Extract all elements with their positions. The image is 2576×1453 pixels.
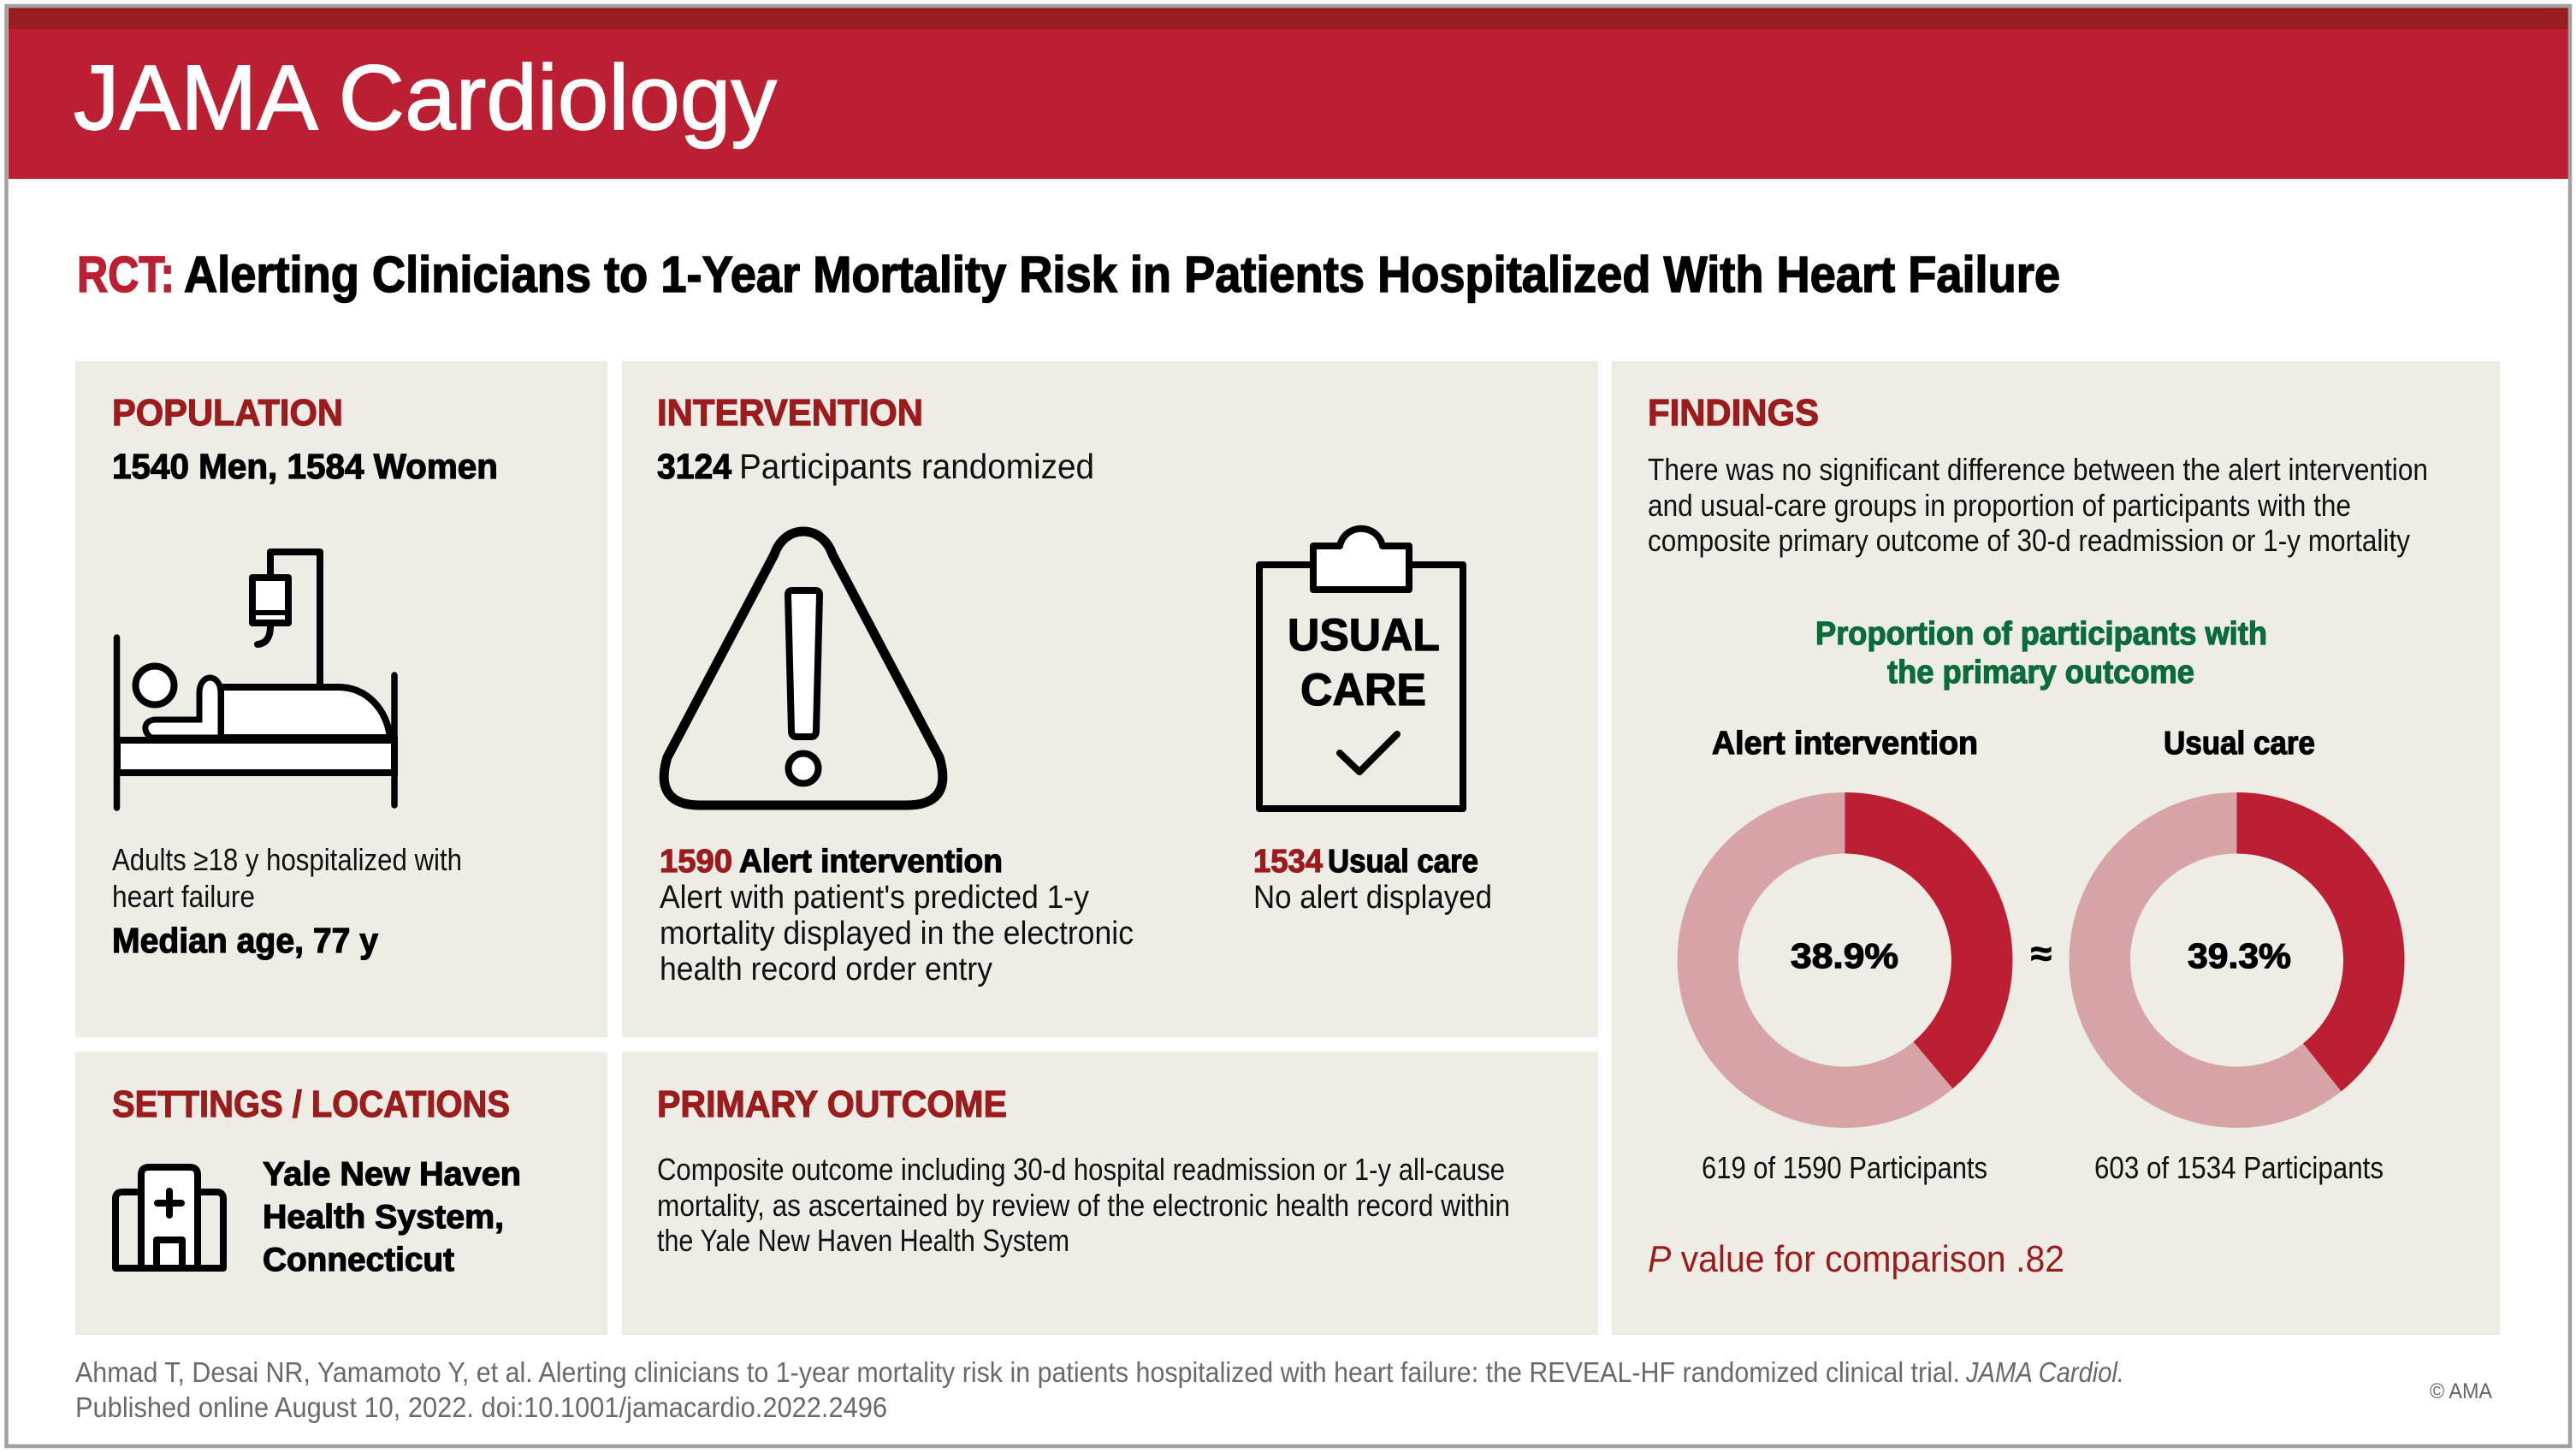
icon: hospital xyxy=(115,1167,223,1268)
usual care arm: No alert displayed xyxy=(1253,880,1492,916)
primary outcome description: Composite outcome including 30-d hospital readmission or 1-y all-cause xyxy=(657,1152,1505,1187)
chart title: the primary outcome xyxy=(1887,655,2194,691)
alert intervention arm: Alert intervention xyxy=(739,844,1003,880)
participants randomized: 3124 xyxy=(657,447,731,486)
heading: primary outcome: PRIMARY OUTCOME xyxy=(657,1083,1007,1125)
participant counts: 1540 Men, 1584 Women xyxy=(112,447,498,486)
primary outcome description xyxy=(657,1152,1510,1258)
approximately equal symbol: ≈ xyxy=(2031,935,2052,973)
population description: heart failure xyxy=(112,879,255,914)
chart title: Proportion of participants with xyxy=(1815,616,2267,652)
p value: P value for comparison .82 xyxy=(1648,1238,2064,1280)
median age: Median age, 77 y xyxy=(112,921,378,960)
panel: intervention xyxy=(622,361,1598,1037)
findings description: There was no significant difference between the alert intervention xyxy=(1648,452,2428,487)
title: RCT: xyxy=(77,246,175,303)
icon: usual care clipboard: USUAL xyxy=(1288,610,1440,661)
findings description xyxy=(1648,452,2428,558)
alert intervention arm: Alert with patient's predicted 1-y xyxy=(660,880,1089,916)
heading: population: POPULATION xyxy=(112,392,343,434)
alert intervention arm: 1590 xyxy=(660,844,732,880)
usual care arm: 1534 xyxy=(1253,844,1323,880)
icon: usual care clipboard: CARE xyxy=(1300,665,1426,715)
panel: findings xyxy=(1612,361,2500,1335)
primary outcome description: mortality, as ascertained by review of the electronic health record within xyxy=(657,1188,1510,1223)
location name: Connecticut xyxy=(263,1242,454,1278)
population description xyxy=(112,842,462,914)
location name: Health System, xyxy=(263,1199,504,1236)
usual care label: Usual care xyxy=(2164,726,2315,762)
header banner xyxy=(9,8,2568,179)
primary outcome description: the Yale New Haven Health System xyxy=(657,1223,1069,1258)
heading: settings and locations: SETTINGS / LOCATIONS xyxy=(112,1083,510,1125)
icon: usual care clipboard xyxy=(1259,529,1463,809)
citation xyxy=(75,1356,2124,1423)
panel: primary outcome xyxy=(622,1052,1598,1335)
panel: population xyxy=(75,361,607,1037)
alert intervention arm xyxy=(660,844,1134,987)
journal name: JAMA Cardiology xyxy=(74,45,777,149)
alert intervention count: 619 of 1590 Participants xyxy=(1702,1150,1987,1185)
location name xyxy=(263,1156,521,1278)
participants randomized: Participants randomized xyxy=(739,447,1094,486)
citation: JAMA Cardiol. xyxy=(1965,1356,2124,1388)
citation: Published online August 10, 2022. doi:10.1001/jamacardio.2022.2496 xyxy=(75,1391,887,1423)
icon: patient in hospital bed xyxy=(116,552,394,808)
icon: alert triangle xyxy=(664,531,943,805)
usual care arm: Usual care xyxy=(1328,844,1478,880)
donut chart: usual care: 39.3% xyxy=(2188,936,2291,976)
population description: Adults ≥18 y hospitalized with xyxy=(112,842,462,877)
donut chart: alert intervention xyxy=(1708,823,1982,1097)
chart title xyxy=(1815,616,2267,691)
copyright: © AMA xyxy=(2430,1379,2492,1403)
location name: Yale New Haven xyxy=(263,1156,521,1193)
alert intervention arm: health record order entry xyxy=(660,952,992,987)
usual care arm xyxy=(1253,844,1492,916)
citation: Ahmad T, Desai NR, Yamamoto Y, et al. Alerting clinicians to 1-year mortality risk in patients hospitalized with heart failure: the REVEAL-HF randomized clinical trial. xyxy=(75,1356,1960,1388)
donut chart: alert intervention: 38.9% xyxy=(1791,936,1898,976)
alert intervention label: Alert intervention xyxy=(1712,726,1978,762)
heading: findings: FINDINGS xyxy=(1648,392,1819,434)
title: Alerting Clinicians to 1-Year Mortality Risk in Patients Hospitalized With Heart Failure xyxy=(184,246,2060,303)
alert intervention arm: mortality displayed in the electronic xyxy=(660,916,1134,952)
findings description: and usual-care groups in proportion of participants with the xyxy=(1648,488,2351,523)
findings description: composite primary outcome of 30-d readmission or 1-y mortality xyxy=(1648,523,2410,558)
panel: settings and locations xyxy=(75,1052,607,1335)
donut chart: usual care xyxy=(2099,823,2374,1097)
heading: intervention: INTERVENTION xyxy=(657,392,923,434)
usual care count: 603 of 1534 Participants xyxy=(2094,1150,2384,1185)
